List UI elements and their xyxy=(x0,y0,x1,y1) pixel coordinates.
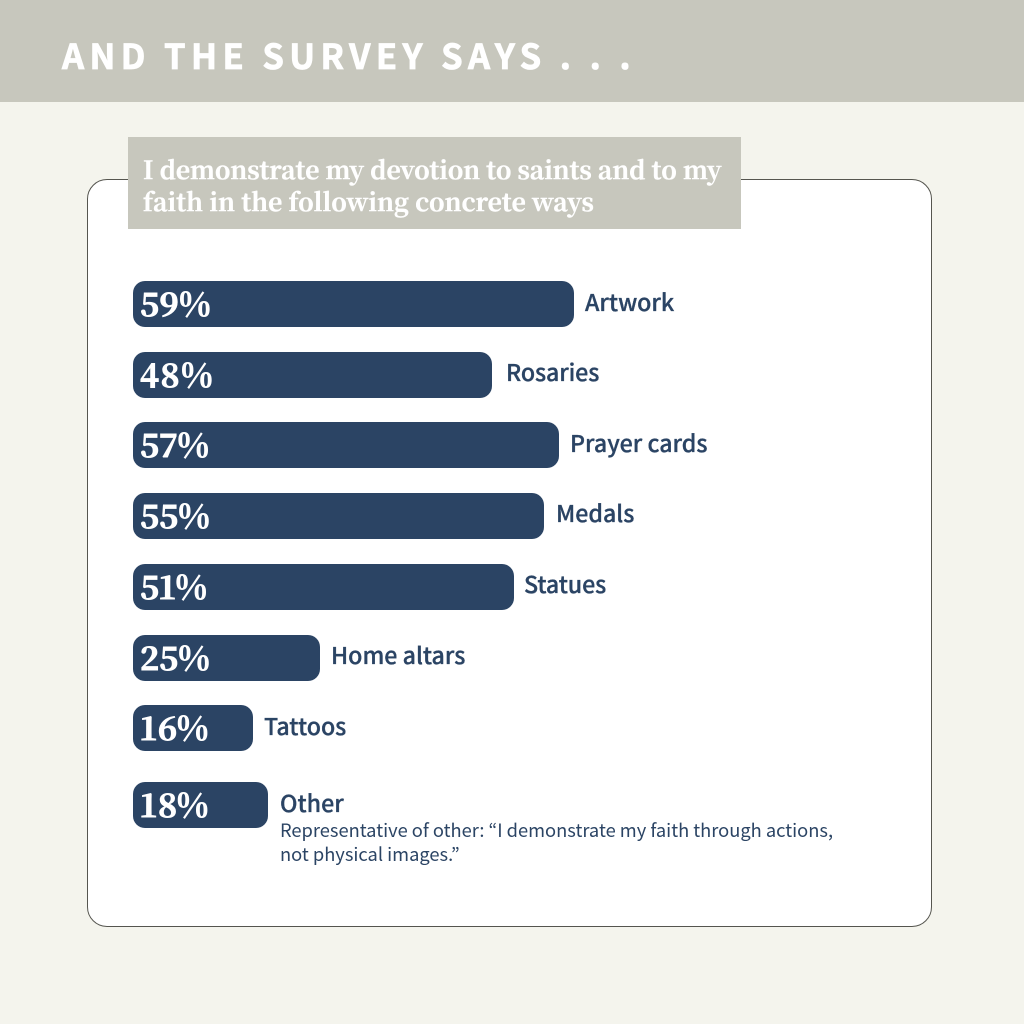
bar: tattoos xyxy=(133,705,253,751)
note: other xyxy=(280,817,833,867)
bar: prayer cards xyxy=(133,422,559,468)
bar: medals xyxy=(133,493,544,539)
bar: other: 18% xyxy=(139,781,208,827)
bar: rosaries: 48% xyxy=(140,351,214,397)
bar: prayer cards: 57% xyxy=(140,421,208,467)
bar: tattoos: 16% xyxy=(139,704,208,750)
heading text: faith in the following concrete ways xyxy=(143,184,594,218)
bar: statues: 51% xyxy=(140,563,205,609)
bar: rosaries xyxy=(133,352,492,398)
bar: artwork: 59% xyxy=(140,280,211,326)
heading: survey statement xyxy=(128,137,741,229)
note: other: Representative of other: “I demonstrate my faith through actions, xyxy=(280,817,833,843)
bar: home altars xyxy=(133,635,320,681)
bar: statues xyxy=(133,564,514,610)
note: other: not physical images.” xyxy=(280,841,460,867)
label: tattoos: Tattoos xyxy=(264,708,346,742)
label: rosaries: Rosaries xyxy=(506,354,599,388)
bar: home altars: 25% xyxy=(140,634,210,680)
title: AND THE SURVEY SAYS . . . xyxy=(62,29,636,79)
bar: other xyxy=(133,782,268,828)
heading text xyxy=(143,152,722,218)
bar: artwork xyxy=(133,281,574,327)
panel: survey results xyxy=(87,179,932,927)
label: home altars: Home altars xyxy=(331,637,465,671)
header band xyxy=(0,0,1024,102)
label: artwork: Artwork xyxy=(585,284,674,318)
bar: medals: 55% xyxy=(140,492,210,538)
label: other: Other xyxy=(280,785,344,819)
heading text: I demonstrate my devotion to saints and to my xyxy=(143,152,721,187)
label: prayer cards: Prayer cards xyxy=(570,425,708,459)
label: statues: Statues xyxy=(524,566,606,600)
label: medals: Medals xyxy=(556,495,634,529)
